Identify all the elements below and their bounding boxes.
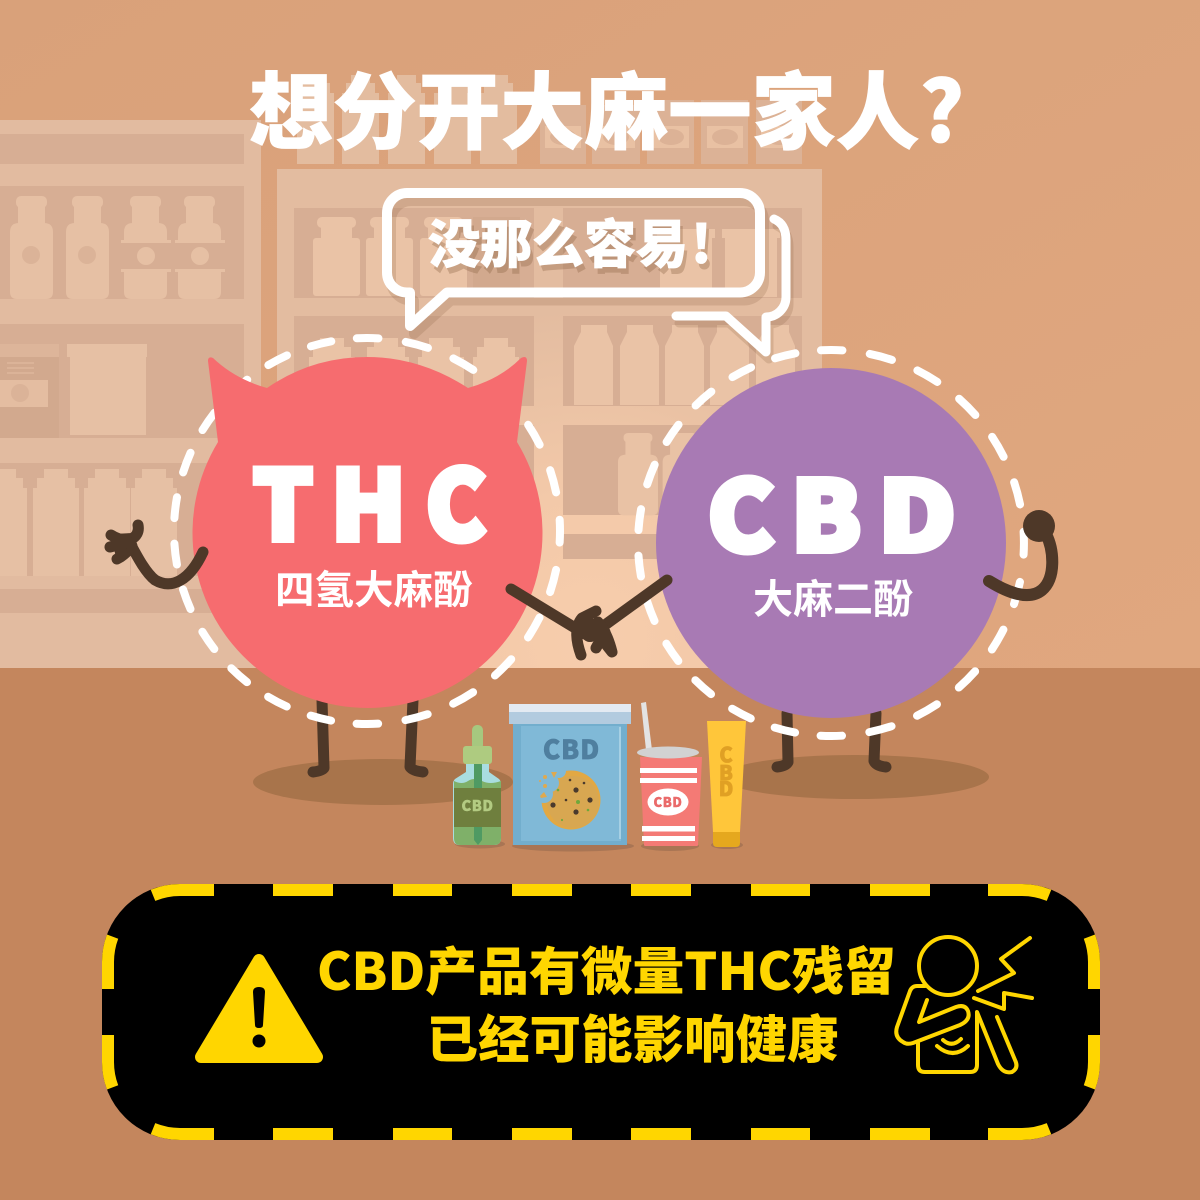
tube label text: D <box>719 773 733 802</box>
cookie <box>535 764 600 830</box>
speech bubble: CBD <box>676 219 789 359</box>
dashed outline <box>638 350 1024 736</box>
cup label text: CBD <box>654 792 682 811</box>
CBD label: C <box>708 440 774 580</box>
product: CBD drink cup <box>637 702 702 851</box>
CBD label: B <box>791 439 861 579</box>
chinese name: 四氢大麻酚 <box>275 559 473 616</box>
speech bubble: THC <box>387 193 764 334</box>
bubble text: 没那么容易! <box>431 209 715 284</box>
character: CBD <box>638 350 1055 767</box>
CBD label <box>708 439 956 580</box>
warning text line 2: 已经可能影响健康 <box>426 998 839 1073</box>
THC label: H <box>331 429 406 568</box>
chinese name: 大麻二酚 <box>753 567 913 625</box>
left arm and hand <box>110 525 203 584</box>
tube label text: C <box>719 739 733 768</box>
background shelves <box>0 75 822 668</box>
icon: person in pain <box>896 937 1032 1072</box>
holding hands <box>511 580 667 655</box>
box label text: CBD <box>543 730 600 767</box>
top shelf products <box>297 75 802 164</box>
background wall <box>0 0 1200 668</box>
THC label <box>253 429 486 568</box>
left shelf unit <box>0 120 261 668</box>
tube label text: B <box>719 757 733 786</box>
product: CBD tube <box>707 721 746 849</box>
product: CBD oil dropper <box>453 725 505 848</box>
icon: warning triangle <box>201 960 317 1057</box>
centre shelf unit <box>277 169 822 668</box>
warning text line 1: CBD产品有微量THC残留 <box>317 930 896 1005</box>
THC label: C <box>426 429 486 568</box>
bubble text: 没那么容易! <box>428 203 712 278</box>
floor shadows <box>253 755 989 805</box>
warning panel <box>102 884 1100 1140</box>
THC label: T <box>253 430 313 568</box>
character: THC <box>110 338 560 772</box>
oil label text: CBD <box>461 795 494 816</box>
panel dashed border <box>108 890 1094 1134</box>
legs <box>777 713 886 767</box>
body <box>656 368 1006 718</box>
floor <box>0 668 1200 1200</box>
product: CBD cookie box <box>509 704 634 852</box>
dashed outline <box>174 338 560 724</box>
legs <box>313 700 423 772</box>
right arm and fist <box>989 510 1055 595</box>
body with horns <box>192 357 542 708</box>
headline: 想分开大麻一家人? <box>249 46 964 167</box>
CBD label: D <box>878 440 956 580</box>
